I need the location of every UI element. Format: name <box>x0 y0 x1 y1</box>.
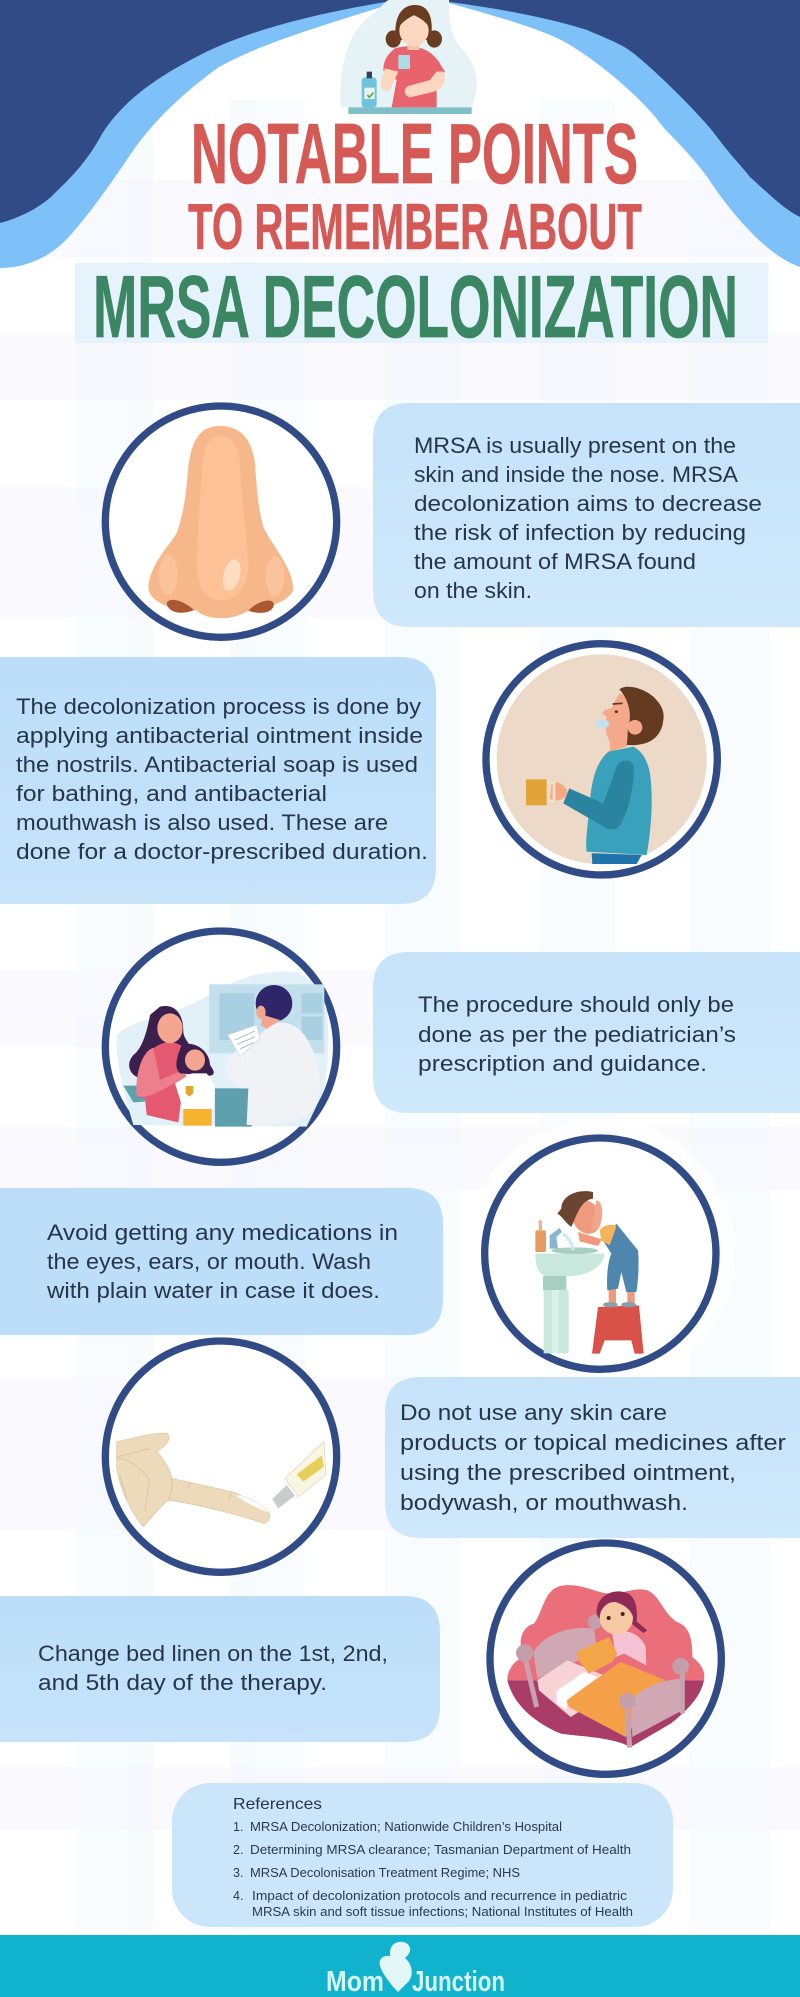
text block: bodywash, or mouthwash. <box>400 1490 688 1515</box>
text block: Change bed linen on the 1st, 2nd, <box>38 1641 388 1666</box>
text block <box>38 1641 388 1695</box>
references list: 1. <box>233 1820 243 1834</box>
text block: the nostrils. Antibacterial soap is used <box>16 752 418 777</box>
references list: 4. <box>233 1889 243 1903</box>
text block: using the prescribed ointment, <box>400 1460 736 1485</box>
icon: doctor with mother and child <box>105 931 337 1162</box>
icon: nose <box>105 406 337 637</box>
references list: Determining MRSA clearance; Tasmanian Department of Health <box>250 1843 631 1857</box>
icon: girl with mouthwash <box>340 0 477 114</box>
icon: boy washing face <box>465 1119 735 1389</box>
text block <box>400 1400 787 1515</box>
panel: MRSA presence <box>373 403 800 627</box>
panel: references <box>172 1783 673 1927</box>
icon: girl making bed <box>490 1543 721 1774</box>
text block: the eyes, ears, or mouth. Wash <box>47 1249 371 1274</box>
references list: 3. <box>233 1866 243 1880</box>
text block: Avoid getting any medications in <box>47 1220 398 1245</box>
panel: avoid eyes ears mouth <box>0 1188 443 1335</box>
footer <box>0 1935 800 1997</box>
references list: Impact of decolonization protocols and recurrence in pediatric <box>252 1889 627 1903</box>
text block <box>418 992 736 1076</box>
text block <box>46 1220 398 1303</box>
references list: MRSA Decolonization; Nationwide Children’s Hospital <box>250 1820 562 1834</box>
text block: done for a doctor-prescribed duration. <box>16 839 428 864</box>
references list: 2. <box>233 1843 243 1857</box>
panel: change bed linen <box>0 1596 440 1742</box>
references list: MRSA Decolonisation Treatment Regime; NHS <box>250 1866 520 1880</box>
text block: done as per the pediatrician’s <box>418 1022 736 1047</box>
heading band <box>75 263 768 343</box>
title <box>75 107 768 356</box>
references list: MRSA skin and soft tissue infections; National Institutes of Health <box>252 1905 633 1919</box>
text block: The procedure should only be <box>418 992 734 1017</box>
text block: Do not use any skin care <box>400 1400 667 1425</box>
text block: the risk of infection by reducing <box>414 520 746 545</box>
text block: for bathing, and antibacterial <box>16 781 327 806</box>
references list <box>233 1820 633 1919</box>
text block: with plain water in case it does. <box>46 1278 380 1303</box>
panel: prescription guidance <box>373 952 800 1113</box>
panel: skin care products <box>385 1377 800 1538</box>
icon: person gargling <box>486 644 717 875</box>
text block: mouthwash is also used. These are <box>16 810 388 835</box>
header wave <box>0 0 800 268</box>
text block <box>414 433 762 603</box>
references heading: References <box>233 1796 322 1813</box>
text block: the amount of MRSA found <box>414 549 696 574</box>
text block: on the skin. <box>414 578 532 603</box>
text block: MRSA is usually present on the <box>414 433 736 458</box>
text block: skin and inside the nose. MRSA <box>414 462 738 487</box>
logo icon <box>380 1942 412 1992</box>
text block <box>16 694 428 864</box>
text block: The decolonization process is done by <box>16 694 422 719</box>
text block: prescription and guidance. <box>418 1051 707 1076</box>
text block: products or topical medicines after <box>400 1430 787 1455</box>
panel: decolonization process <box>0 657 436 904</box>
icon: finger with ointment tube <box>105 1341 337 1572</box>
text block: applying antibacterial ointment inside <box>16 723 423 748</box>
text block: decolonization aims to decrease <box>414 491 762 516</box>
text block: and 5th day of the therapy. <box>38 1670 327 1695</box>
